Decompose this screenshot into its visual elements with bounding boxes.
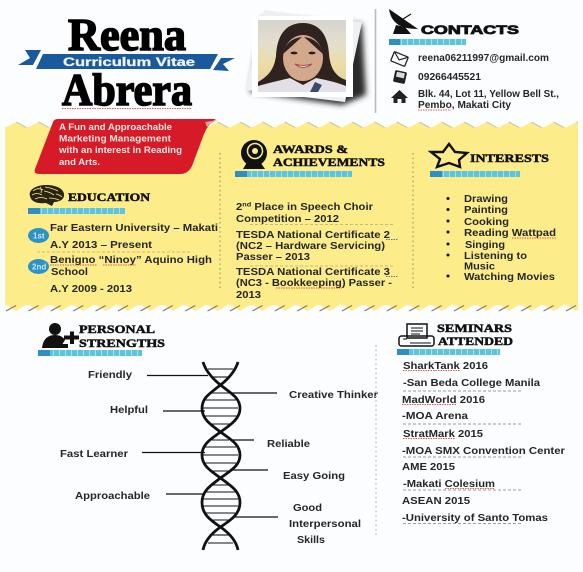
interests list: Painting [464,205,508,216]
entry: college: A.Y 2013 – Present [50,240,153,251]
label: approachable [75,491,205,502]
icon: printer [399,324,434,346]
award: NC2: (NC2 – Hardware Servicing) [236,241,385,252]
heading: contacts: CONTACTS [421,23,519,37]
seminar: MadWorld: MadWorld 2016 [402,395,485,406]
interests list: Listening to [464,251,527,262]
award: NC3: TESDA National Certificate 3 [236,267,390,278]
heading: personal strengths: STRENGTHS [79,336,165,350]
panel: personal strengths [38,322,378,550]
label: good interpersonal skills: Interpersonal [289,519,361,530]
address: Blk. 44, Lot 11, Yellow Bell St., [418,89,559,100]
address [418,89,559,111]
label: reliable [232,439,310,450]
entry: high school [28,255,212,295]
entry: college [28,223,218,251]
entry: high school: School [51,267,88,278]
heading: awards: ACHIEVEMENTS [273,155,385,169]
last name: Abrera [62,65,192,115]
heading: seminars attended: ATTENDED [438,334,513,348]
ribbon banner [18,50,235,71]
label: helpful [110,405,205,416]
callout: red tagline [35,119,218,174]
panel: awards and achievements [235,140,398,301]
award: NC3: 2013 [236,290,261,301]
heading: education: EDUCATION [68,190,150,204]
award: NC2: Passer – 2013 [236,252,310,263]
seminar: StratMark: -MOA SMX Convention Center [402,446,565,457]
entry: college: Far Eastern University – Makati [50,223,218,234]
icon: person with plus [42,323,79,348]
interests list: Cooking [464,217,509,228]
icon: envelope [391,52,408,66]
callout: red tagline: and Arts. [59,157,100,167]
seminar: MadWorld: -MOA Arena [402,411,469,422]
icon: brain [30,185,64,206]
panel: interests [430,144,556,283]
interests list: Singing [465,240,505,251]
callout: red tagline: with an interest in Reading [58,145,182,155]
award: speech choir: nd [242,202,251,208]
label: good interpersonal skills: Skills [297,535,325,546]
section bar [38,350,142,356]
section bar [28,208,125,214]
icon: house [391,90,408,103]
heading: awards: AWARDS & [273,142,348,156]
award: speech choir: Place in Speech Choir [251,202,373,213]
seminar: ASEAN: ASEAN 2015 [402,496,470,507]
label: approachable: Approachable [75,491,150,502]
seminar: SharkTank [403,361,540,389]
interests list: Music [464,262,495,272]
section bar [397,349,500,355]
entry: college: 1st [33,232,45,240]
seminar: ASEAN: -University of Santo Tomas [402,513,548,524]
seminar: SharkTank: SharkTank 2016 [403,361,488,372]
award: NC3 [236,267,398,301]
phone number: 09266445521 [418,72,481,83]
email: reena06211997@gmail.com [418,53,549,64]
callout: red tagline: Marketing Management [59,134,171,144]
seminar: StratMark: StratMark 2015 [403,429,483,440]
entry: high school: 2nd [32,262,46,272]
icon: satellite dish [389,9,418,34]
award: speech choir: 2 [236,202,242,213]
panel: education [28,185,218,295]
label: reliable: Reliable [267,439,310,450]
label: good interpersonal skills: Good [293,503,322,514]
address: Pembo, Makati City [418,100,511,111]
award: NC3: (NC3 - Bookkeeping) Passer - [236,278,392,289]
award: NC2: TESDA National Certificate 2 [236,230,390,241]
label: friendly: Friendly [88,370,132,381]
yellow band background [5,121,578,312]
section bar [235,171,352,177]
seminar: ASEAN [402,496,548,524]
seminar: StratMark [402,429,565,457]
heading: personal strengths: PERSONAL [79,322,155,336]
icon: award rosette [241,140,267,169]
photo with stacked frames [246,10,366,105]
chart: DNA helix [202,362,240,550]
interests list: Reading Wattpad [464,228,556,239]
icon: phone [393,70,407,84]
seminar: AME: AME 2015 [402,462,455,473]
section bar [430,171,520,177]
seminar: MadWorld [402,395,485,422]
label: fast learner: Fast Learner [60,449,128,460]
panel: contacts [389,9,559,111]
interests list: Watching Movies [464,272,555,283]
seminar: SharkTank: -San Beda College Manila [403,378,540,389]
label: friendly [88,370,208,381]
ribbon banner: Curriculum Vitae [63,55,195,69]
heading: interests: INTERESTS [470,151,549,165]
interests list [446,194,556,283]
label: easy going [232,470,345,482]
panel: seminars attended [397,321,565,524]
award: NC2 [236,230,398,263]
heading: personal strengths [79,322,165,350]
seminar: AME: -Makati Colesium [403,479,495,490]
entry: high school: Benigno “Ninoy” Aquino High [50,255,212,266]
section bar [389,39,466,45]
entry: high school: A.Y 2009 - 2013 [50,284,132,295]
heading: seminars attended [437,321,513,348]
first name: Reena [68,10,186,60]
award: speech choir [236,202,373,225]
heading: seminars attended: SEMINARS [437,321,512,335]
seminar: AME [402,462,495,490]
label: easy going: Easy Going [283,471,345,482]
icon: star outline [431,144,467,167]
callout: red tagline: A Fun and Approachable [59,122,172,132]
heading: awards [273,142,385,169]
award: speech choir: Competition – 2012 [236,214,339,225]
interests list: Drawing [464,194,508,205]
label: creative thinker: Creative Thinker [289,390,378,401]
title: name and banner [18,10,235,115]
label: helpful: Helpful [110,405,148,416]
label: good interpersonal skills [235,503,361,546]
divider [374,9,376,113]
